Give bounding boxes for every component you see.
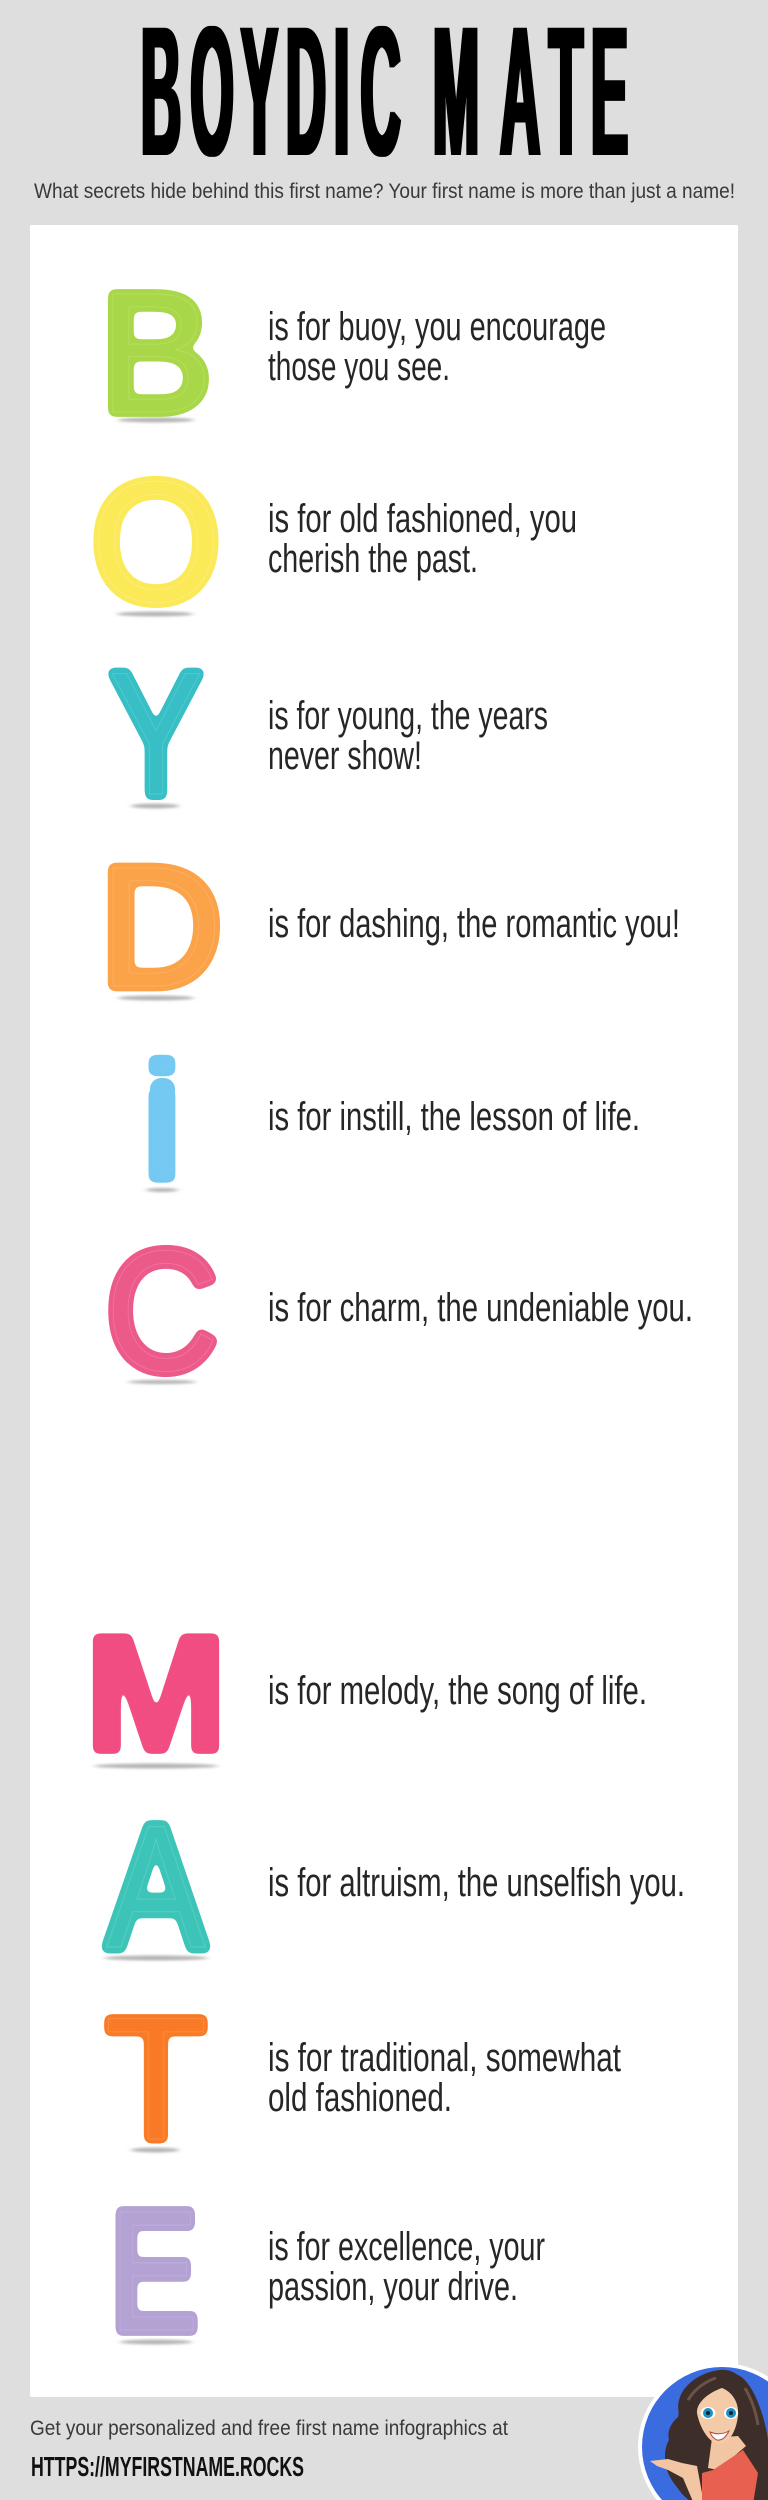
icon: letter i: i <box>140 1029 184 1215</box>
icon: letter C: C <box>105 1215 219 1406</box>
icon: letter B: B <box>99 258 213 449</box>
row: E <box>109 2174 545 2367</box>
icon: letter B: B <box>99 258 213 449</box>
text: Y meaning: is for young, the years <box>268 694 548 738</box>
icon: letter O: O <box>91 445 221 637</box>
icon: letter O: O <box>91 445 221 637</box>
icon: letter C: C <box>105 1215 219 1406</box>
text: T meaning: old fashioned. <box>268 2076 452 2120</box>
text: T meaning: is for traditional, somewhat <box>268 2036 621 2080</box>
text: Y meaning: never show! <box>268 734 422 778</box>
icon: letter Y: Y <box>109 636 203 832</box>
text: i meaning: is for instill, the lesson of life. <box>268 1095 640 1139</box>
row: O <box>91 445 577 637</box>
row: D <box>99 832 680 1023</box>
text: B meaning: is for buoy, you encourage <box>268 305 606 349</box>
row: i <box>140 1029 640 1215</box>
icon: letter E: E <box>109 2174 199 2367</box>
icon: letter D: D <box>99 832 223 1023</box>
icon: letter T: T <box>105 1982 207 2177</box>
icon: letter D: D <box>99 832 223 1023</box>
text: O meaning: is for old fashioned, you <box>268 497 577 541</box>
text: B meaning: those you see. <box>268 345 450 389</box>
icon: letter A: A <box>106 1790 206 1985</box>
row: M <box>84 1600 647 1786</box>
footer url: HTTPS://MYFIRSTNAME.ROCKS <box>31 2451 304 2482</box>
text: Y meaning <box>268 694 548 778</box>
icon: letter Y: Y <box>109 636 203 832</box>
text: E meaning: passion, your drive. <box>268 2265 518 2309</box>
text: B meaning <box>268 305 606 389</box>
text: E meaning: is for excellence, your <box>268 2225 545 2269</box>
icon: letter A: A <box>106 1790 206 1985</box>
row: C <box>105 1215 693 1406</box>
text: E meaning <box>268 2225 545 2309</box>
text: O meaning: cherish the past. <box>268 537 478 581</box>
footer call to action: Get your personalized and free first name infographics at <box>30 2417 508 2440</box>
icon: letter T: T <box>105 1982 207 2177</box>
text: O meaning <box>268 497 577 581</box>
row: T <box>105 1982 621 2177</box>
icon: letter M: M <box>84 1600 228 1786</box>
row: A <box>104 1790 685 1985</box>
icon: letter E: E <box>109 2174 199 2367</box>
row: B <box>99 258 606 449</box>
icon: avatar woman in circle <box>638 2363 768 2500</box>
row: Y <box>109 636 548 832</box>
text: T meaning <box>268 2036 621 2120</box>
